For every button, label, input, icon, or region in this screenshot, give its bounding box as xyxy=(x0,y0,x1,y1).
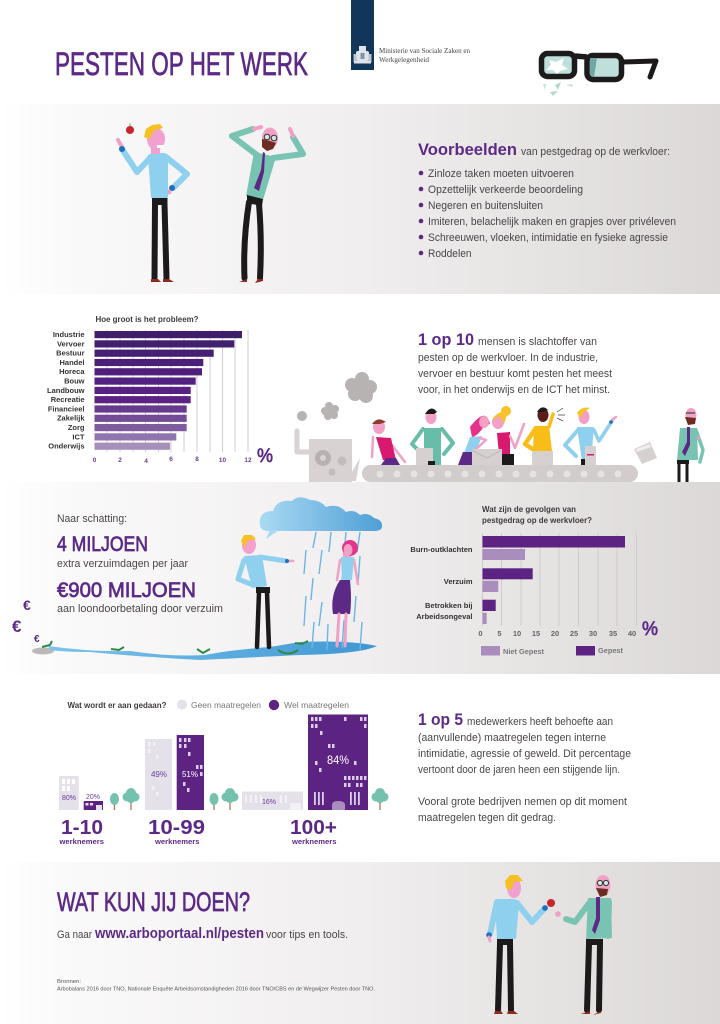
illustration: man receiving apple xyxy=(555,875,612,1015)
bar chart: hoe groot is het probleem: Onderwijs xyxy=(48,442,84,451)
bar chart: hoe groot is het probleem: 4 xyxy=(144,458,148,465)
text block: voorbeelden: Imiteren, belachelijk maken en grapjes over privéleven xyxy=(428,216,676,228)
text block: 1 op 5: Vooral grote bedrijven nemen op dit moment xyxy=(418,796,627,808)
text block: naar schatting: 4 MILJOEN xyxy=(57,533,148,556)
labels: company size: werknemers xyxy=(291,837,336,846)
logo: ministry xyxy=(351,0,470,70)
bar chart: hoe groot is het probleem: % xyxy=(257,446,273,467)
text block: website call to action: www.arboportaal.nl/pesten xyxy=(94,926,264,942)
chart: buildings 100+ employees xyxy=(242,714,368,810)
chart: buildings 1-10 employees: 20% xyxy=(86,794,100,801)
text block: voorbeelden xyxy=(418,140,676,260)
illustration: man with apple xyxy=(118,124,187,282)
chart: buildings 1-10 employees xyxy=(59,776,103,810)
sources: Bronnen: xyxy=(57,979,81,985)
text block: 1 op 5: (aanvullende) maatregelen tegen interne xyxy=(418,732,606,744)
illustration: stream of money xyxy=(32,641,377,660)
bar chart: gevolgen van pestgedrag: Arbeidsongeval xyxy=(416,612,472,621)
text block: voorbeelden: Negeren en buitensluiten xyxy=(428,200,543,212)
text block: naar schatting: aan loondoorbetaling door verzuim xyxy=(57,603,223,615)
icon: euro signs: € xyxy=(12,617,22,636)
text block: voorbeelden: Roddelen xyxy=(428,248,472,260)
logo: ministry: Werkgelegenheid xyxy=(379,56,430,64)
labels: company size: 1-10 xyxy=(61,817,103,839)
bar chart: hoe groot is het probleem: 12 xyxy=(244,457,252,464)
icon: euro signs: € xyxy=(34,634,40,645)
bar chart: gevolgen van pestgedrag: 40 xyxy=(628,629,636,638)
bar chart: gevolgen van pestgedrag: pestgedrag op de werkvloer? xyxy=(482,515,592,525)
bar chart: hoe groot is het probleem: Zakelijk xyxy=(57,414,85,423)
bar chart: hoe groot is het probleem: Landbouw xyxy=(47,386,85,395)
icon: flying paper xyxy=(634,442,657,464)
legend: wat wordt er aan gedaan: Wel maatregelen xyxy=(284,700,349,710)
text block: 1 op 5: vertoont door de jaren heen een stijgende lijn. xyxy=(418,764,620,776)
bar chart: hoe groot is het probleem: 6 xyxy=(169,456,173,463)
text block: 1 op 10: voor, in het onderwijs en de ICT het minst. xyxy=(418,384,610,396)
bar chart: gevolgen van pestgedrag: 20 xyxy=(551,629,559,638)
bar chart: gevolgen van pestgedrag: 35 xyxy=(609,629,617,638)
text block: naar schatting: €900 MILJOEN xyxy=(57,579,196,602)
bar chart: gevolgen van pestgedrag: % xyxy=(642,619,658,640)
labels: company size xyxy=(58,817,337,846)
chart: buildings 1-10 employees: 80% xyxy=(62,795,76,802)
text block: 1 op 5 xyxy=(418,710,631,824)
bar chart: hoe groot is het probleem: Financieel xyxy=(48,404,84,413)
text block: 1 op 5: intimidatie, agressie of geweld. Dit percentage xyxy=(418,748,631,760)
text block: voorbeelden: Schreeuwen, vloeken, intimidatie en fysieke agressie xyxy=(428,232,668,244)
text block: website call to action: Ga naar xyxy=(57,929,92,941)
illustration: man offering apple xyxy=(486,875,555,1014)
text block: website call to action xyxy=(57,926,348,942)
text block: 1 op 10: mensen is slachtoffer van xyxy=(478,336,597,348)
bar chart: hoe groot is het probleem: Recreatie xyxy=(51,395,84,404)
icon: broken glasses xyxy=(542,54,656,96)
bar chart: gevolgen van pestgedrag: 15 xyxy=(532,629,540,638)
bar chart: hoe groot is het probleem: Vervoer xyxy=(57,339,85,348)
text block: naar schatting xyxy=(57,513,223,615)
text block: 1 op 10: vervoer en bestuur komt pesten het meest xyxy=(418,368,612,380)
title: PESTEN OP HET WERK xyxy=(55,46,308,82)
text block: 1 op 5: 1 op 5 xyxy=(418,710,463,729)
chart: buildings 10-99 employees: 49% xyxy=(151,770,167,779)
illustration: standing manager xyxy=(677,408,703,482)
text block: 1 op 10: pesten op de werkvloer. In de industrie, xyxy=(418,352,598,364)
illustration: conveyor belt xyxy=(362,465,638,482)
bar chart: gevolgen van pestgedrag: Burn-outklachten xyxy=(410,545,473,554)
panel: examples background xyxy=(0,104,720,294)
bar chart: hoe groot is het probleem: 2 xyxy=(118,457,122,464)
bar chart: gevolgen van pestgedrag: 30 xyxy=(589,629,597,638)
chart: buildings 10-99 employees: 51% xyxy=(182,770,198,779)
bar chart: hoe groot is het probleem: Zorg xyxy=(68,423,85,432)
bar chart: gevolgen van pestgedrag: 10 xyxy=(513,629,521,638)
panel: consequences background xyxy=(0,482,720,674)
text block: 1 op 10 xyxy=(418,330,612,396)
bar chart: gevolgen van pestgedrag: Gepest xyxy=(598,646,623,655)
chart: buildings 10-99 employees xyxy=(145,735,204,810)
bar chart: gevolgen van pestgedrag: 0 xyxy=(478,629,483,638)
text block: 1 op 5: maatregelen tegen dit gedrag. xyxy=(418,812,556,824)
sources xyxy=(57,979,375,992)
bar chart: gevolgen van pestgedrag: Verzuim xyxy=(444,577,473,586)
illustration: workers at conveyor xyxy=(372,406,616,466)
text block: website call to action: voor tips en tools. xyxy=(266,929,348,941)
bar chart: hoe groot is het probleem: Hoe groot is het probleem? xyxy=(96,314,198,324)
text block: naar schatting: Naar schatting: xyxy=(57,513,127,525)
logo: ministry: Ministerie van Sociale Zaken en xyxy=(379,47,470,55)
bar chart: gevolgen van pestgedrag: Niet Gepest xyxy=(503,647,544,656)
bar chart: hoe groot is het probleem: Industrie xyxy=(53,330,84,339)
chart: buildings 100+ employees: 84% xyxy=(327,753,349,767)
sources: Arbobalans 2016 door TNO, Nationale Enquête Arbeidsomstandigheden 2016 door TNO/CBS en de Wegwijzer Pesten door TNO. xyxy=(57,986,375,992)
icon: euro signs: € xyxy=(23,597,31,613)
chart: buildings 100+ employees: 16% xyxy=(262,799,276,806)
bar chart: gevolgen van pestgedrag xyxy=(410,504,658,656)
labels: company size: 100+ xyxy=(290,817,337,839)
bar chart: hoe groot is het probleem: Bestuur xyxy=(56,349,85,358)
bar chart: hoe groot is het probleem: Handel xyxy=(59,358,84,367)
text block: voorbeelden: Zinloze taken moeten uitvoeren xyxy=(428,168,574,180)
bar chart: gevolgen van pestgedrag: 5 xyxy=(497,629,502,638)
bar chart: gevolgen van pestgedrag: 25 xyxy=(570,629,578,638)
bar chart: hoe groot is het probleem xyxy=(47,314,273,467)
panel: what can you do background xyxy=(0,862,720,1024)
illustration: man with raised arms xyxy=(232,127,303,283)
text block: voorbeelden: Opzettelijk verkeerde beoordeling xyxy=(428,184,583,196)
labels: company size: 10-99 xyxy=(148,817,205,839)
illustration: factory machine with smoke xyxy=(297,372,377,482)
bar chart: hoe groot is het probleem: 8 xyxy=(195,456,199,463)
legend: wat wordt er aan gedaan: Geen maatregelen xyxy=(191,700,261,710)
text block: voorbeelden: van pestgedrag op de werkvloer: xyxy=(521,146,670,158)
text block: 1 op 10: 1 op 10 xyxy=(418,330,474,349)
bar chart: hoe groot is het probleem: Horeca xyxy=(59,367,85,376)
illustration: rain cloud with speech tail xyxy=(260,497,382,650)
bar chart: gevolgen van pestgedrag: Wat zijn de gevolgen van xyxy=(482,504,576,514)
legend: wat wordt er aan gedaan xyxy=(68,700,349,710)
illustration: woman in the rain xyxy=(332,540,358,646)
bar chart: gevolgen van pestgedrag: Betrokken bij xyxy=(425,601,472,610)
labels: company size: werknemers xyxy=(58,837,104,846)
bar chart: hoe groot is het probleem: 10 xyxy=(219,457,226,464)
text block: naar schatting: extra verzuimdagen per jaar xyxy=(57,558,188,570)
labels: company size: werknemers xyxy=(154,837,200,846)
illustration: pointing man xyxy=(238,535,293,647)
icons: trees xyxy=(110,788,388,810)
text block: 1 op 5: medewerkers heeft behoefte aan xyxy=(467,716,613,728)
bar chart: hoe groot is het probleem: 0 xyxy=(93,457,97,464)
bar chart: hoe groot is het probleem: Bouw xyxy=(64,376,85,386)
icon: euro signs xyxy=(12,597,40,645)
legend: wat wordt er aan gedaan: Wat wordt er aan gedaan? xyxy=(68,700,166,710)
text block: voorbeelden: Voorbeelden xyxy=(418,140,517,159)
heading: wat kun jij doen: WAT KUN JIJ DOEN? xyxy=(57,887,250,917)
bar chart: hoe groot is het probleem: ICT xyxy=(72,432,85,441)
